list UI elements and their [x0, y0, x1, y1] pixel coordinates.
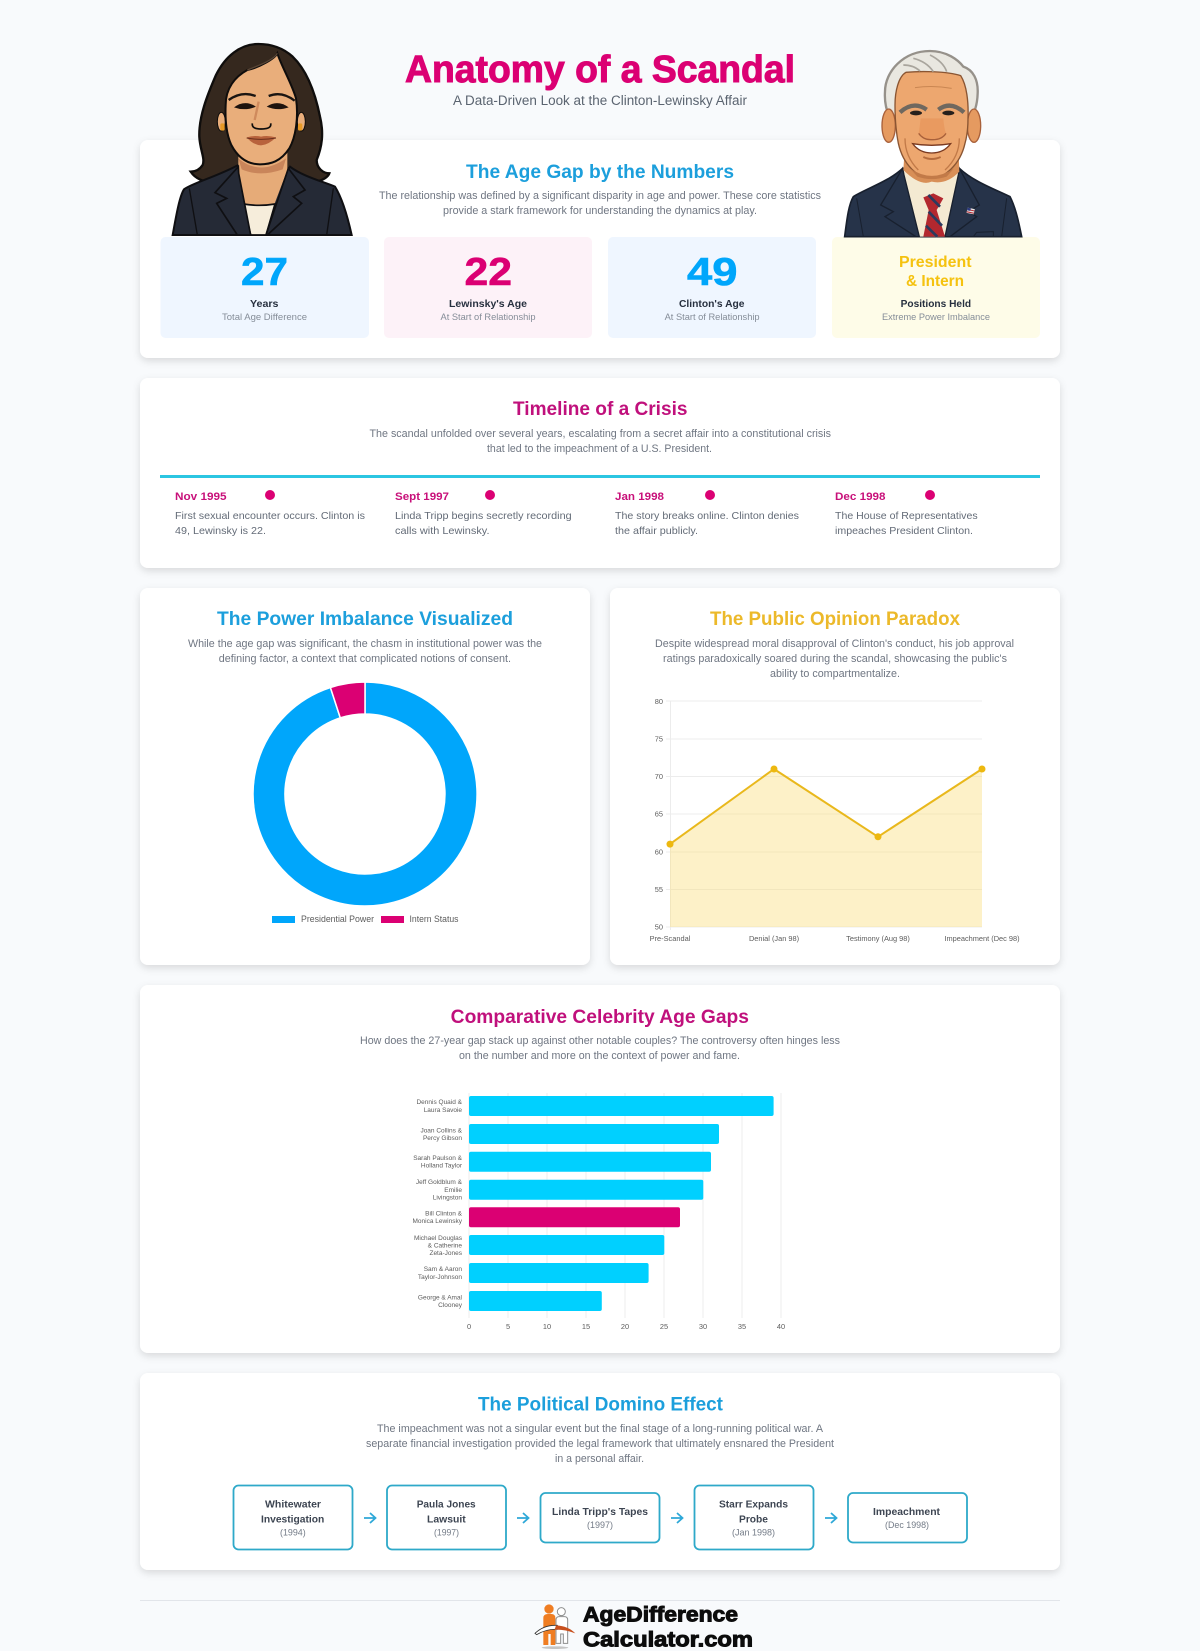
header: title and subtitle [405, 49, 795, 108]
bar chart: age gaps: 35 [738, 1322, 746, 1331]
bar chart: age gaps: Taylor-Johnson [418, 1274, 462, 1281]
heading: domino effect: The Political Domino Effect [478, 1395, 724, 1416]
portrait: Bill Clinton illustration [845, 51, 1022, 237]
flow step: Whitewater Investigation: Investigation [261, 1514, 324, 1526]
bar chart: age gaps: 10 [543, 1322, 551, 1331]
bar chart: age gaps: 5 [506, 1322, 510, 1331]
bar chart: age gaps: Jeff Goldblum & [416, 1179, 463, 1186]
stat card: 22 Lewinsky's age: 22 [464, 251, 512, 294]
text: celebrity gaps description: on the number and more on the context of power and fame. [459, 1050, 740, 1062]
line chart: approval ratings: 65 [655, 810, 663, 818]
flow step: Linda Tripp's Tapes: (1997) [587, 1520, 613, 1531]
timeline rule [160, 475, 1040, 478]
stat card: president and intern: Positions Held [901, 298, 971, 310]
flow step: Linda Tripp's Tapes [540, 1493, 660, 1542]
flow step: Paula Jones Lawsuit: Paula Jones [417, 1499, 476, 1511]
flow step: Whitewater Investigation: Whitewater [265, 1499, 321, 1511]
bar chart: age gaps: Michael Douglas [414, 1235, 463, 1242]
text: age gap description [379, 190, 821, 217]
timeline event: Dec 1998: The House of Representatives [835, 510, 978, 522]
subtitle: A Data-Driven Look at the Clinton-Lewinsky Affair [453, 93, 747, 108]
bar chart: age gaps: Dennis Quaid & [416, 1099, 463, 1106]
timeline event: Nov 1995: Nov 1995 [175, 491, 227, 503]
logo text [583, 1604, 753, 1651]
flow step: Starr Expands Probe: Starr Expands [719, 1499, 788, 1511]
donut legend [272, 914, 459, 924]
heading: power imbalance: The Power Imbalance Visualized [217, 609, 513, 630]
line chart: approval ratings: Denial (Jan 98) [749, 934, 799, 943]
line chart: approval ratings: 60 [655, 848, 663, 856]
flow step: Whitewater Investigation: (1994) [280, 1528, 306, 1539]
donut chart [253, 682, 477, 906]
text: age gap description: The relationship was defined by a significant disparity in age and power. These core statistics [379, 190, 821, 202]
bar chart: age gaps: & Catherine [428, 1242, 462, 1250]
text: power imbalance description [188, 638, 542, 665]
timeline event: Jan 1998: the affair publicly. [615, 525, 698, 537]
stat card: 27 years: Total Age Difference [222, 312, 307, 323]
timeline event: Dec 1998 [835, 490, 978, 537]
bar chart: age gaps: Percy Gibson [423, 1135, 462, 1142]
bar chart: age gaps: 0 [467, 1322, 471, 1331]
heading: public opinion: The Public Opinion Paradox [710, 609, 960, 630]
bar chart: age gaps: Monica Lewinsky [412, 1218, 463, 1225]
bar chart: age gaps: Livingston [433, 1194, 462, 1202]
stat card: 49 Clinton's age [608, 237, 816, 338]
donut legend: Presidential Power [301, 914, 374, 924]
portrait: Monica Lewinsky illustration [173, 44, 352, 235]
bar chart: age gaps: 30 [699, 1322, 707, 1331]
bar chart: age gaps: Clooney [438, 1302, 463, 1309]
stat card: president and intern [832, 237, 1040, 338]
stat card: 22 Lewinsky's age [384, 237, 592, 338]
bar chart: age gaps: Sarah Paulson & [413, 1155, 463, 1162]
arrow [517, 1513, 528, 1523]
stat card: 27 years: Years [250, 298, 279, 310]
bar chart: age gaps: Sam & Aaron [424, 1266, 462, 1273]
flow step: Paula Jones Lawsuit [387, 1486, 506, 1550]
bar chart: age gaps: Zeta-Jones [429, 1250, 463, 1257]
timeline event: Sept 1997: calls with Lewinsky. [395, 525, 490, 537]
timeline event: Dec 1998: Dec 1998 [835, 491, 886, 503]
text: public opinion description: Despite widespread moral disapproval of Clinton's conduct, his job approval [655, 638, 1014, 650]
bar chart: age gaps: Emilie [444, 1187, 462, 1194]
arrow [364, 1513, 376, 1523]
bar chart: age gaps [412, 1093, 785, 1331]
stat card: president and intern: Extreme Power Imbalance [882, 312, 990, 323]
bar chart: age gaps: Laura Savoie [424, 1107, 462, 1114]
line chart: approval ratings: Testimony (Aug 98) [846, 934, 910, 943]
panel: the public opinion paradox [610, 588, 1060, 965]
bar chart: age gaps: 20 [621, 1322, 629, 1331]
heading: timeline: Timeline of a Crisis [513, 399, 688, 420]
bar chart: age gaps: 40 [777, 1322, 785, 1331]
stat card: 49 Clinton's age: 49 [687, 251, 738, 294]
bar chart: age gaps: Joan Collins & [420, 1128, 463, 1134]
text: domino description: separate financial investigation provided the legal framework that ultimately ensnared the President [366, 1438, 834, 1450]
line chart: approval ratings: Pre-Scandal [650, 934, 691, 943]
line chart: approval ratings: 70 [655, 772, 663, 781]
logo text: AgeDifference [583, 1604, 738, 1627]
timeline event: Nov 1995: First sexual encounter occurs. Clinton is [175, 510, 365, 522]
stat card: 27 years: 27 [241, 251, 288, 294]
arrow [825, 1513, 836, 1523]
title: Anatomy of a Scandal [405, 49, 795, 91]
timeline event: Jan 1998: Jan 1998 [615, 491, 664, 503]
stat card: 27 years [160, 237, 369, 338]
flow step: Impeachment: Impeachment [873, 1506, 940, 1518]
bar chart: age gaps: George & Amal [418, 1294, 463, 1302]
text: domino description: The impeachment was not a singular event but the final stage of a long-running political war. A [377, 1423, 824, 1435]
text: power imbalance description: While the age gap was significant, the chasm in institutional power was the [188, 638, 542, 650]
text: public opinion description: ratings paradoxically soared during the scandal, showcasing the public's [663, 653, 1007, 665]
text: public opinion description: ability to compartmentalize. [770, 668, 900, 680]
flow step: Linda Tripp's Tapes: Linda Tripp's Tapes [552, 1506, 648, 1518]
donut legend: Intern Status [410, 914, 459, 924]
bar chart: age gaps: 15 [582, 1322, 590, 1331]
timeline event: Sept 1997 [395, 490, 572, 537]
flow step: Starr Expands Probe [694, 1486, 814, 1550]
heading: celebrity gaps: Comparative Celebrity Age Gaps [451, 1007, 749, 1028]
timeline event: Nov 1995 [175, 490, 365, 537]
panel: the power imbalance visualized [140, 588, 590, 965]
timeline event: Nov 1995: 49, Lewinsky is 22. [175, 525, 266, 537]
stat card: president and intern: & Intern [906, 273, 964, 290]
text: timeline description: that led to the impeachment of a U.S. President. [487, 443, 712, 455]
text: age gap description: provide a stark framework for understanding the dynamics at play. [443, 205, 757, 217]
line chart: approval ratings: 75 [655, 734, 663, 744]
stat card: 49 Clinton's age: Clinton's Age [679, 298, 745, 310]
footer with logo [140, 1600, 1060, 1651]
line chart: approval ratings: 50 [655, 922, 663, 932]
text: timeline description [370, 428, 831, 455]
timeline event: Jan 1998 [615, 490, 799, 537]
flow step: Impeachment: (Dec 1998) [885, 1520, 929, 1531]
line chart: approval ratings: Impeachment (Dec 98) [944, 934, 1020, 943]
panel: the age gap by the numbers [140, 140, 1060, 358]
flow step: Starr Expands Probe: (Jan 1998) [732, 1528, 775, 1539]
stat card: president and intern: President [899, 254, 972, 271]
panel: comparative celebrity age gaps [140, 985, 1060, 1353]
text: domino description: in a personal affair. [555, 1453, 644, 1465]
line chart: approval ratings [650, 697, 1020, 943]
line chart: approval ratings: 55 [655, 885, 663, 894]
bar chart: age gaps: Bill Clinton & [425, 1210, 463, 1218]
timeline event: Sept 1997: Linda Tripp begins secretly recording [395, 510, 572, 522]
text: timeline description: The scandal unfolded over several years, escalating from a secret affair into a constitutional crisis [370, 428, 831, 440]
panel: timeline of a crisis [140, 378, 1060, 568]
flow step: Paula Jones Lawsuit: Lawsuit [427, 1514, 466, 1526]
timeline event: Dec 1998: impeaches President Clinton. [835, 525, 973, 537]
stat card: 49 Clinton's age: At Start of Relationship [665, 312, 760, 323]
text: public opinion description [655, 638, 1014, 680]
icon: age difference logo [535, 1604, 575, 1649]
stat card: 22 Lewinsky's age: At Start of Relationship [440, 312, 536, 323]
flow step: Starr Expands Probe: Probe [739, 1514, 768, 1526]
heading: age gap: The Age Gap by the Numbers [466, 162, 734, 183]
timeline event: Jan 1998: The story breaks online. Clinton denies [615, 510, 799, 522]
text: celebrity gaps description [360, 1035, 840, 1062]
text: power imbalance description: defining factor, a context that complicated notions of consent. [219, 653, 511, 665]
bar chart: age gaps: 25 [660, 1322, 668, 1331]
text: domino description [366, 1423, 834, 1465]
flow step: Whitewater Investigation [234, 1486, 352, 1550]
timeline event: Sept 1997: Sept 1997 [395, 491, 449, 503]
stat card: 22 Lewinsky's age: Lewinsky's Age [449, 298, 527, 310]
panel: the political domino effect [140, 1373, 1060, 1570]
arrow [671, 1513, 682, 1523]
bar chart: age gaps: Holland Taylor [421, 1162, 463, 1170]
line chart: approval ratings: 80 [655, 697, 663, 706]
text: celebrity gaps description: How does the 27-year gap stack up against other notable couples? The controversy often hinges less [360, 1035, 840, 1047]
flow step: Paula Jones Lawsuit: (1997) [434, 1528, 459, 1539]
flow step: Impeachment [848, 1493, 967, 1542]
